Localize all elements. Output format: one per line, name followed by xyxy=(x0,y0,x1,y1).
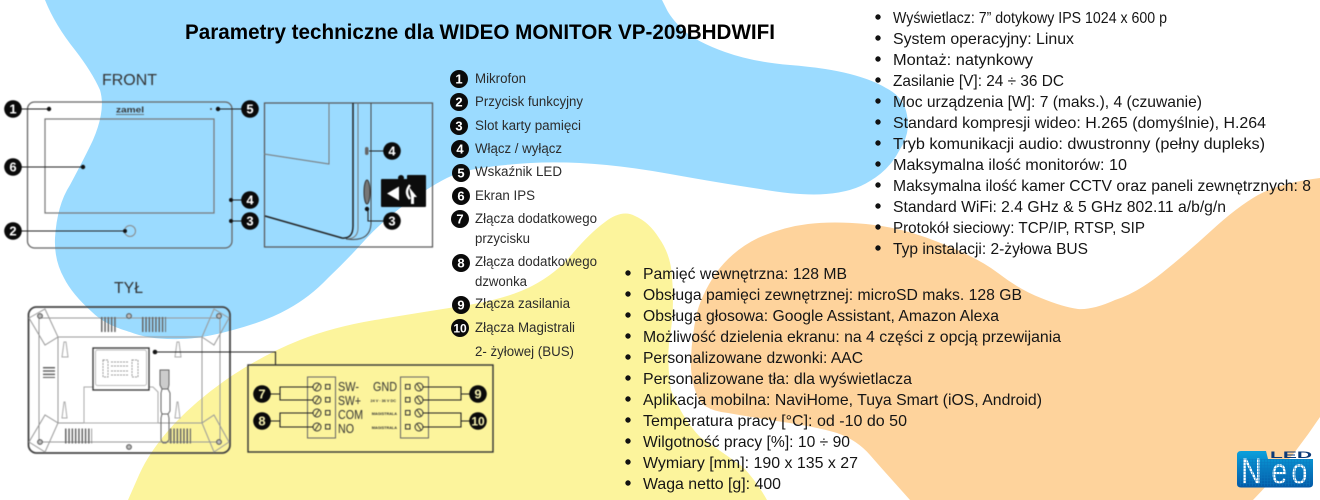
legend item 4: Włącz / wyłącz xyxy=(475,141,562,156)
legend item 6 xyxy=(452,187,535,205)
terminal labels left: COM xyxy=(338,407,363,422)
legend item 5: 5 xyxy=(457,166,465,180)
background blob: peach xyxy=(691,178,1320,500)
side detail frame xyxy=(264,103,432,247)
callout 10: 10 xyxy=(471,414,485,428)
list text: Wilgotność pracy [%]: 10 ÷ 90 xyxy=(643,434,850,451)
terminal labels right xyxy=(370,379,397,430)
list text: Typ instalacji: 2-żyłowa BUS xyxy=(893,241,1088,258)
function button xyxy=(124,226,136,236)
callout 4 switch: 4 xyxy=(246,192,254,208)
terminal labels right: 24 V · 36 V DC xyxy=(370,399,396,403)
legend item 7: Złącza dodatkowego xyxy=(475,211,597,226)
rear body outline xyxy=(28,307,230,453)
list text: System operacyjny: Linux xyxy=(893,31,1074,48)
list text: Personalizowane tła: dla wyświetlacza xyxy=(643,371,912,388)
callout 4 side: 4 xyxy=(388,144,396,158)
legend item 10: 2- żyłowej (BUS) xyxy=(475,344,574,359)
specification list: display and system xyxy=(878,10,1311,258)
legend item 6: 6 xyxy=(457,188,465,204)
list text: Maksymalna ilość monitorów: 10 xyxy=(893,157,1127,174)
callout 6 screen xyxy=(4,158,85,176)
monitor screen xyxy=(45,119,214,213)
list text xyxy=(893,10,1311,258)
legend item 4: 4 xyxy=(456,142,464,156)
callout 3 card slot xyxy=(229,212,259,230)
list text: Montaż: natynkowy xyxy=(893,52,1033,69)
right terminal strip xyxy=(400,377,428,438)
logo word Neo: Neo xyxy=(1241,450,1307,491)
legend item 2: Przycisk funkcyjny xyxy=(475,94,583,109)
power switch xyxy=(365,147,368,155)
legend item 1: 1 xyxy=(455,72,463,86)
legend item 9 xyxy=(452,296,571,314)
heading: rear: TYŁ xyxy=(114,280,143,297)
legend item 2 xyxy=(450,93,583,111)
callout 9: 9 xyxy=(474,386,482,402)
callout 3 side: 3 xyxy=(388,214,396,228)
legend item 5: Wskaźnik LED xyxy=(475,164,562,179)
terminal labels left: SW- xyxy=(338,379,359,394)
list text: Obsługa pamięci zewnętrznej: microSD maks. 128 GB xyxy=(643,287,1022,304)
legend item 3: Slot karty pamięci xyxy=(475,118,581,133)
legend item 8: dzwonka xyxy=(475,274,528,289)
list text xyxy=(643,266,1061,493)
callout 2 button: 2 xyxy=(9,224,17,238)
legend item 1 xyxy=(450,70,526,88)
callout 7: 7 xyxy=(258,386,266,402)
icon: memory card insertion xyxy=(381,175,426,207)
diagram: front view of monitor xyxy=(4,72,259,248)
terminal labels left: SW+ xyxy=(338,393,361,408)
callout 3 card slot: 3 xyxy=(246,214,254,228)
terminal labels right: MAGISTRALA xyxy=(372,426,397,430)
terminal labels right: MAGISTRALA xyxy=(372,412,397,416)
left terminal strip xyxy=(308,377,336,438)
callout 10 xyxy=(423,412,487,430)
specification list: memory and environment xyxy=(628,266,1061,493)
callout 7 xyxy=(253,385,313,403)
heading: front: FRONT xyxy=(102,72,157,89)
legend item 10 xyxy=(451,319,575,359)
monitor front body xyxy=(28,102,232,248)
background blob: blue xyxy=(45,0,908,339)
callout 1 microphone: 1 xyxy=(9,102,17,116)
callout 6 screen: 6 xyxy=(9,160,17,174)
leader line from rear xyxy=(153,350,276,365)
side profile lines xyxy=(264,103,371,240)
list text: Pamięć wewnętrzna: 128 MB xyxy=(643,266,847,283)
callout 8: 8 xyxy=(258,414,266,428)
list text: Zasilanie [V]: 24 ÷ 36 DC xyxy=(893,73,1064,90)
legend item 4 xyxy=(451,140,562,158)
legend item 8 xyxy=(452,254,597,289)
bullets xyxy=(625,273,631,484)
legend item 3: 3 xyxy=(455,118,463,134)
logo badge xyxy=(1237,451,1313,488)
callout 3 side xyxy=(365,207,401,230)
rear terminal cover xyxy=(93,348,149,390)
callout 9 xyxy=(423,385,487,403)
screws xyxy=(38,314,221,449)
list text: Protokół sieciowy: TCP/IP, RTSP, SIP xyxy=(893,220,1145,237)
legend item 8: 8 xyxy=(457,256,465,270)
diagram: terminal block detail xyxy=(153,350,493,452)
legend item 3 xyxy=(450,117,581,135)
list text: Waga netto [g]: 400 xyxy=(643,476,781,493)
legend: numbered parts xyxy=(450,70,597,359)
logo: LED Neo xyxy=(1237,450,1313,491)
terminal labels left xyxy=(338,379,363,436)
ventilation grilles xyxy=(49,324,191,436)
card slot xyxy=(364,180,370,204)
list text: Standard WiFi: 2.4 GHz & 5 GHz 802.11 a/b/g/n xyxy=(893,199,1226,216)
callout 5 led: 5 xyxy=(246,102,254,116)
legend item 7 xyxy=(451,210,597,246)
list text: Obsługa głosowa: Google Assistant, Amazon Alexa xyxy=(643,308,999,325)
legend item 5 xyxy=(452,164,562,182)
cable connector xyxy=(160,370,170,443)
diagram: rear view of monitor xyxy=(28,280,230,453)
bullets xyxy=(875,17,881,249)
legend item 9: 9 xyxy=(457,298,465,312)
list text: Aplikacja mobilna: NaviHome, Tuya Smart (iOS, Android) xyxy=(643,392,1042,409)
legend item 7: przycisku xyxy=(475,231,530,246)
callout 4 side xyxy=(369,142,401,160)
terminal labels left: NO xyxy=(338,421,354,436)
lower rear recess xyxy=(84,387,158,423)
legend item 6: Ekran IPS xyxy=(475,188,535,203)
list text: Maksymalna ilość kamer CCTV oraz paneli zewnętrznych: 8 xyxy=(893,178,1311,195)
legend item 2: 2 xyxy=(455,94,463,110)
list text: Temperatura pracy [°C]: od -10 do 50 xyxy=(643,413,907,430)
callout 8 xyxy=(253,412,313,430)
list text: Tryb komunikacji audio: dwustronny (pełny dupleks) xyxy=(893,136,1265,153)
title: Parametry techniczne dla WIDEO MONITOR VP-209BHDWIFI xyxy=(185,21,775,44)
brand logo: zamel xyxy=(116,106,144,114)
legend item 10: Złącza Magistrali xyxy=(475,320,575,335)
list text: Moc urządzenia [W]: 7 (maks.), 4 (czuwanie) xyxy=(893,94,1202,111)
logo word LED: LED xyxy=(1270,450,1312,461)
legend item 9: Złącza zasilania xyxy=(475,296,571,311)
list text: Standard kompresji wideo: H.265 (domyślnie), H.264 xyxy=(893,115,1266,132)
legend item 7: 7 xyxy=(456,212,464,226)
logo dot matrix overlay xyxy=(1240,459,1310,486)
legend item 1: Mikrofon xyxy=(475,71,526,86)
legend item 8: Złącza dodatkowego xyxy=(475,254,597,269)
diagram: side detail xyxy=(264,103,432,247)
list text: Wyświetlacz: 7” dotykowy IPS 1024 x 600 p xyxy=(893,10,1167,27)
list text: Możliwość dzielenia ekranu: na 4 części z opcją przewijania xyxy=(643,329,1061,346)
mounting holes xyxy=(62,342,181,418)
callout 4 switch xyxy=(229,191,259,209)
terminal box frame xyxy=(248,365,493,452)
background blob: yellow xyxy=(128,214,767,500)
callout 5 led xyxy=(210,100,259,118)
list text: Wymiary [mm]: 190 x 135 x 27 xyxy=(643,455,858,472)
list text: Personalizowane dzwonki: AAC xyxy=(643,350,863,367)
terminal labels right: GND xyxy=(373,379,397,394)
callout 2 button xyxy=(4,222,127,240)
legend item 10: 10 xyxy=(453,322,467,336)
callout 1 microphone xyxy=(4,100,51,118)
rear inner frames xyxy=(29,309,229,452)
